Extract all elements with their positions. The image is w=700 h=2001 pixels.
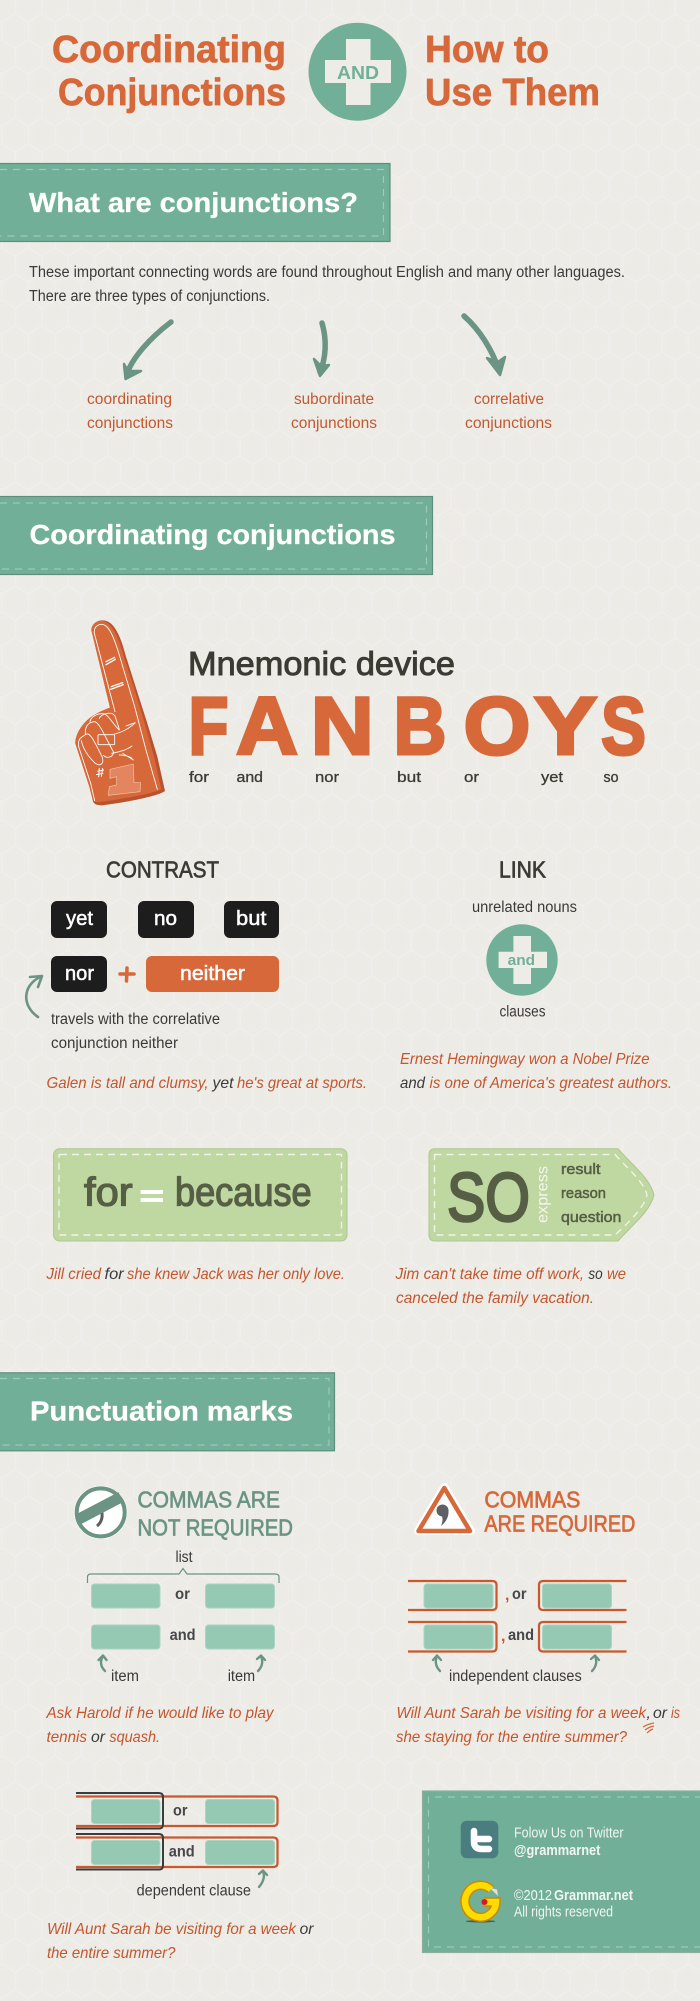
icon: foam finger xyxy=(75,620,165,805)
icon: plus xyxy=(120,968,134,981)
example: independent clauses xyxy=(396,1705,680,1746)
FANBOYS wordmark: A xyxy=(236,681,298,772)
tag: so express: express xyxy=(534,1166,552,1223)
example: independent clauses: she staying for the entire summer? xyxy=(396,1729,627,1746)
text: copyright: All rights reserved xyxy=(514,1904,613,1921)
title: Conjunctions xyxy=(58,72,286,114)
label: correlative conjunctions xyxy=(465,391,552,432)
example: for xyxy=(46,1266,345,1283)
labels: items xyxy=(111,1668,255,1685)
labels: items: item xyxy=(228,1668,255,1685)
example: link: Ernest Hemingway won a Nobel Prize xyxy=(400,1051,650,1068)
label: correlative conjunctions: correlative xyxy=(474,391,544,408)
icon: comma warning xyxy=(418,1487,471,1531)
example: independent clauses: Will Aunt Sarah be visiting for a week xyxy=(396,1705,647,1722)
heading: contrast: CONTRAST xyxy=(106,857,219,883)
FANBOYS words: so xyxy=(604,770,618,786)
example: contrast xyxy=(46,1075,367,1092)
icon: and plus badge: and xyxy=(508,952,535,969)
diagram: list xyxy=(88,1549,279,1649)
labels: items: item xyxy=(111,1668,139,1685)
FANBOYS wordmark: Y xyxy=(534,681,597,772)
label: coordinating conjunctions: coordinating xyxy=(87,391,172,408)
button: nor xyxy=(51,956,107,992)
tag: so express: reason xyxy=(561,1185,606,1202)
example: link: and xyxy=(400,1075,426,1092)
diagram: list: and xyxy=(170,1627,196,1644)
text: copyright: Grammar.net xyxy=(554,1887,633,1904)
diagram: independent clauses: , xyxy=(501,1628,505,1645)
button: neither xyxy=(146,956,279,992)
text: twitter xyxy=(514,1825,624,1859)
heading: commas are not required xyxy=(138,1487,293,1541)
example: contrast: yet xyxy=(212,1075,234,1092)
icon: G logo xyxy=(465,1885,498,1923)
arrow: dependent clause xyxy=(259,1870,267,1887)
button: no xyxy=(138,901,194,938)
title xyxy=(52,29,600,114)
example: link: is one of America's greatest authors. xyxy=(430,1075,672,1092)
example: contrast: he's great at sports. xyxy=(237,1075,367,1092)
title: Use Them xyxy=(425,72,600,114)
text: twitter: Folow Us on Twitter xyxy=(514,1825,624,1842)
diagram: dependent clause xyxy=(76,1793,278,1870)
banner: punctuation marks: Punctuation marks xyxy=(30,1396,293,1427)
arrow: to subordinate xyxy=(314,323,329,376)
FANBOYS words: and xyxy=(236,770,263,786)
FANBOYS wordmark: N xyxy=(311,681,374,772)
heading: commas are not required: NOT REQUIRED xyxy=(138,1515,293,1541)
diagram: independent clauses: or xyxy=(512,1586,526,1603)
button: yet: yet xyxy=(66,908,93,930)
diagram: list: list xyxy=(176,1549,193,1566)
label: subordinate conjunctions xyxy=(291,391,377,432)
FANBOYS words: for xyxy=(189,770,209,786)
text: clauses: clauses xyxy=(500,1004,546,1021)
FANBOYS words: or xyxy=(464,770,479,786)
example: independent clauses: is xyxy=(671,1705,680,1722)
button: yet xyxy=(51,901,107,938)
arrow: item left xyxy=(98,1656,106,1671)
arrow: to coordinating xyxy=(124,322,171,379)
icon: AND plus badge xyxy=(308,23,406,121)
example: independent clauses: or xyxy=(653,1705,668,1722)
diagram: independent clauses: and xyxy=(508,1627,534,1644)
example: for: she knew Jack was her only love. xyxy=(127,1266,345,1283)
banner: coordinating conjunctions: Coordinating conjunctions xyxy=(30,519,396,550)
tag: so express xyxy=(429,1149,654,1241)
label: subordinate conjunctions: conjunctions xyxy=(291,415,377,432)
FANBOYS words: yet xyxy=(541,770,563,786)
example: dependent clause: the entire summer? xyxy=(47,1945,175,1962)
arrow: to correlative xyxy=(464,316,505,375)
arrow: to nor xyxy=(26,976,42,1017)
example: dependent clause: Will Aunt Sarah be visiting for a week xyxy=(47,1921,297,1938)
title: Coordinating xyxy=(52,29,286,71)
banner: what are conjunctions: What are conjunctions? xyxy=(29,187,358,218)
tag: for equals because: because xyxy=(175,1171,312,1215)
banner: punctuation marks xyxy=(0,1373,334,1451)
example: list: squash. xyxy=(109,1729,160,1746)
banner: coordinating conjunctions xyxy=(0,496,432,574)
FANBOYS wordmark: B xyxy=(394,681,446,772)
button: no: no xyxy=(154,908,177,930)
text: unrelated nouns: unrelated nouns xyxy=(472,899,577,916)
example: contrast: Galen is tall and clumsy, xyxy=(46,1075,208,1092)
tag: so express: result xyxy=(561,1161,601,1178)
accent marks: comma highlight xyxy=(643,1723,654,1733)
heading: commas are required: COMMAS xyxy=(484,1487,580,1513)
example: dependent clause: or xyxy=(300,1921,314,1938)
icon: and plus badge xyxy=(486,924,558,996)
FANBOYS words: nor xyxy=(315,770,339,786)
example: so: so xyxy=(588,1266,603,1283)
heading: mnemonic device: Mnemonic device xyxy=(188,645,455,682)
example: so: we xyxy=(607,1266,626,1283)
example: independent clauses: , xyxy=(646,1705,651,1722)
note: travels with neither: conjunction neither xyxy=(51,1035,178,1052)
FANBOYS wordmark: F xyxy=(188,681,228,772)
text: twitter: @grammarnet xyxy=(514,1842,600,1859)
heading: commas are required: ARE REQUIRED xyxy=(484,1511,635,1537)
intro text: These important connecting words are found throughout English and many other languages. xyxy=(29,264,625,281)
label: dependent clause: dependent clause xyxy=(137,1883,251,1900)
label: correlative conjunctions: conjunctions xyxy=(465,415,552,432)
example: list: Ask Harold if he would like to play xyxy=(46,1705,274,1722)
tag: so express: question xyxy=(561,1209,621,1226)
panel: footer xyxy=(422,1791,700,1952)
FANBOYS wordmark: S xyxy=(601,681,646,772)
example: for: Jill cried xyxy=(46,1266,102,1283)
note: travels with neither: travels with the correlative xyxy=(51,1011,220,1028)
example: so: canceled the family vacation. xyxy=(396,1290,594,1307)
heading: link: LINK xyxy=(499,857,547,883)
label: subordinate conjunctions: subordinate xyxy=(294,391,374,408)
icon: twitter xyxy=(461,1821,498,1858)
icon: no comma xyxy=(74,1486,127,1539)
diagram: dependent clause: or xyxy=(173,1803,188,1820)
button: but xyxy=(224,901,279,938)
example: list xyxy=(46,1705,274,1746)
heading: commas are not required: COMMAS ARE xyxy=(138,1487,280,1513)
tag: so express: SO xyxy=(447,1159,530,1236)
button: nor: nor xyxy=(65,963,94,985)
FANBOYS words: but xyxy=(397,770,421,786)
text: copyright: ©2012 xyxy=(514,1887,552,1904)
arrow: item right xyxy=(257,1656,265,1671)
arrow: clause right xyxy=(591,1656,599,1671)
label: independent clauses: independent clauses xyxy=(449,1668,582,1685)
label: coordinating conjunctions: conjunctions xyxy=(87,415,173,432)
example: dependent clause xyxy=(47,1921,314,1962)
intro text: There are three types of conjunctions. xyxy=(29,288,270,305)
FANBOYS words xyxy=(189,770,618,786)
arrow: clause left xyxy=(433,1656,441,1671)
diagram: list: or xyxy=(175,1586,190,1603)
FANBOYS wordmark xyxy=(188,681,646,772)
FANBOYS wordmark: O xyxy=(464,681,530,772)
button: neither: neither xyxy=(180,963,245,985)
note: travels with neither xyxy=(51,1011,220,1052)
text: copyright xyxy=(514,1887,633,1921)
example: list: or xyxy=(91,1729,106,1746)
example: list: tennis xyxy=(46,1729,87,1746)
example: so: Jim can't take time off work, xyxy=(395,1266,584,1283)
diagram: dependent clause: and xyxy=(169,1844,195,1861)
example: for: for xyxy=(104,1266,124,1283)
tag: for equals because xyxy=(54,1149,347,1241)
intro text xyxy=(29,264,625,305)
heading: commas are required xyxy=(484,1487,635,1537)
example: so xyxy=(395,1266,626,1307)
button: but: but xyxy=(236,908,267,930)
example: link xyxy=(400,1051,672,1092)
diagram: independent clauses: , xyxy=(505,1587,509,1604)
title: How to xyxy=(425,29,549,71)
diagram: independent clauses xyxy=(408,1581,626,1652)
tag: for equals because: for xyxy=(84,1171,133,1215)
icon: AND plus badge: AND xyxy=(337,63,379,83)
label: coordinating conjunctions xyxy=(87,391,173,432)
banner: what are conjunctions xyxy=(0,164,390,242)
